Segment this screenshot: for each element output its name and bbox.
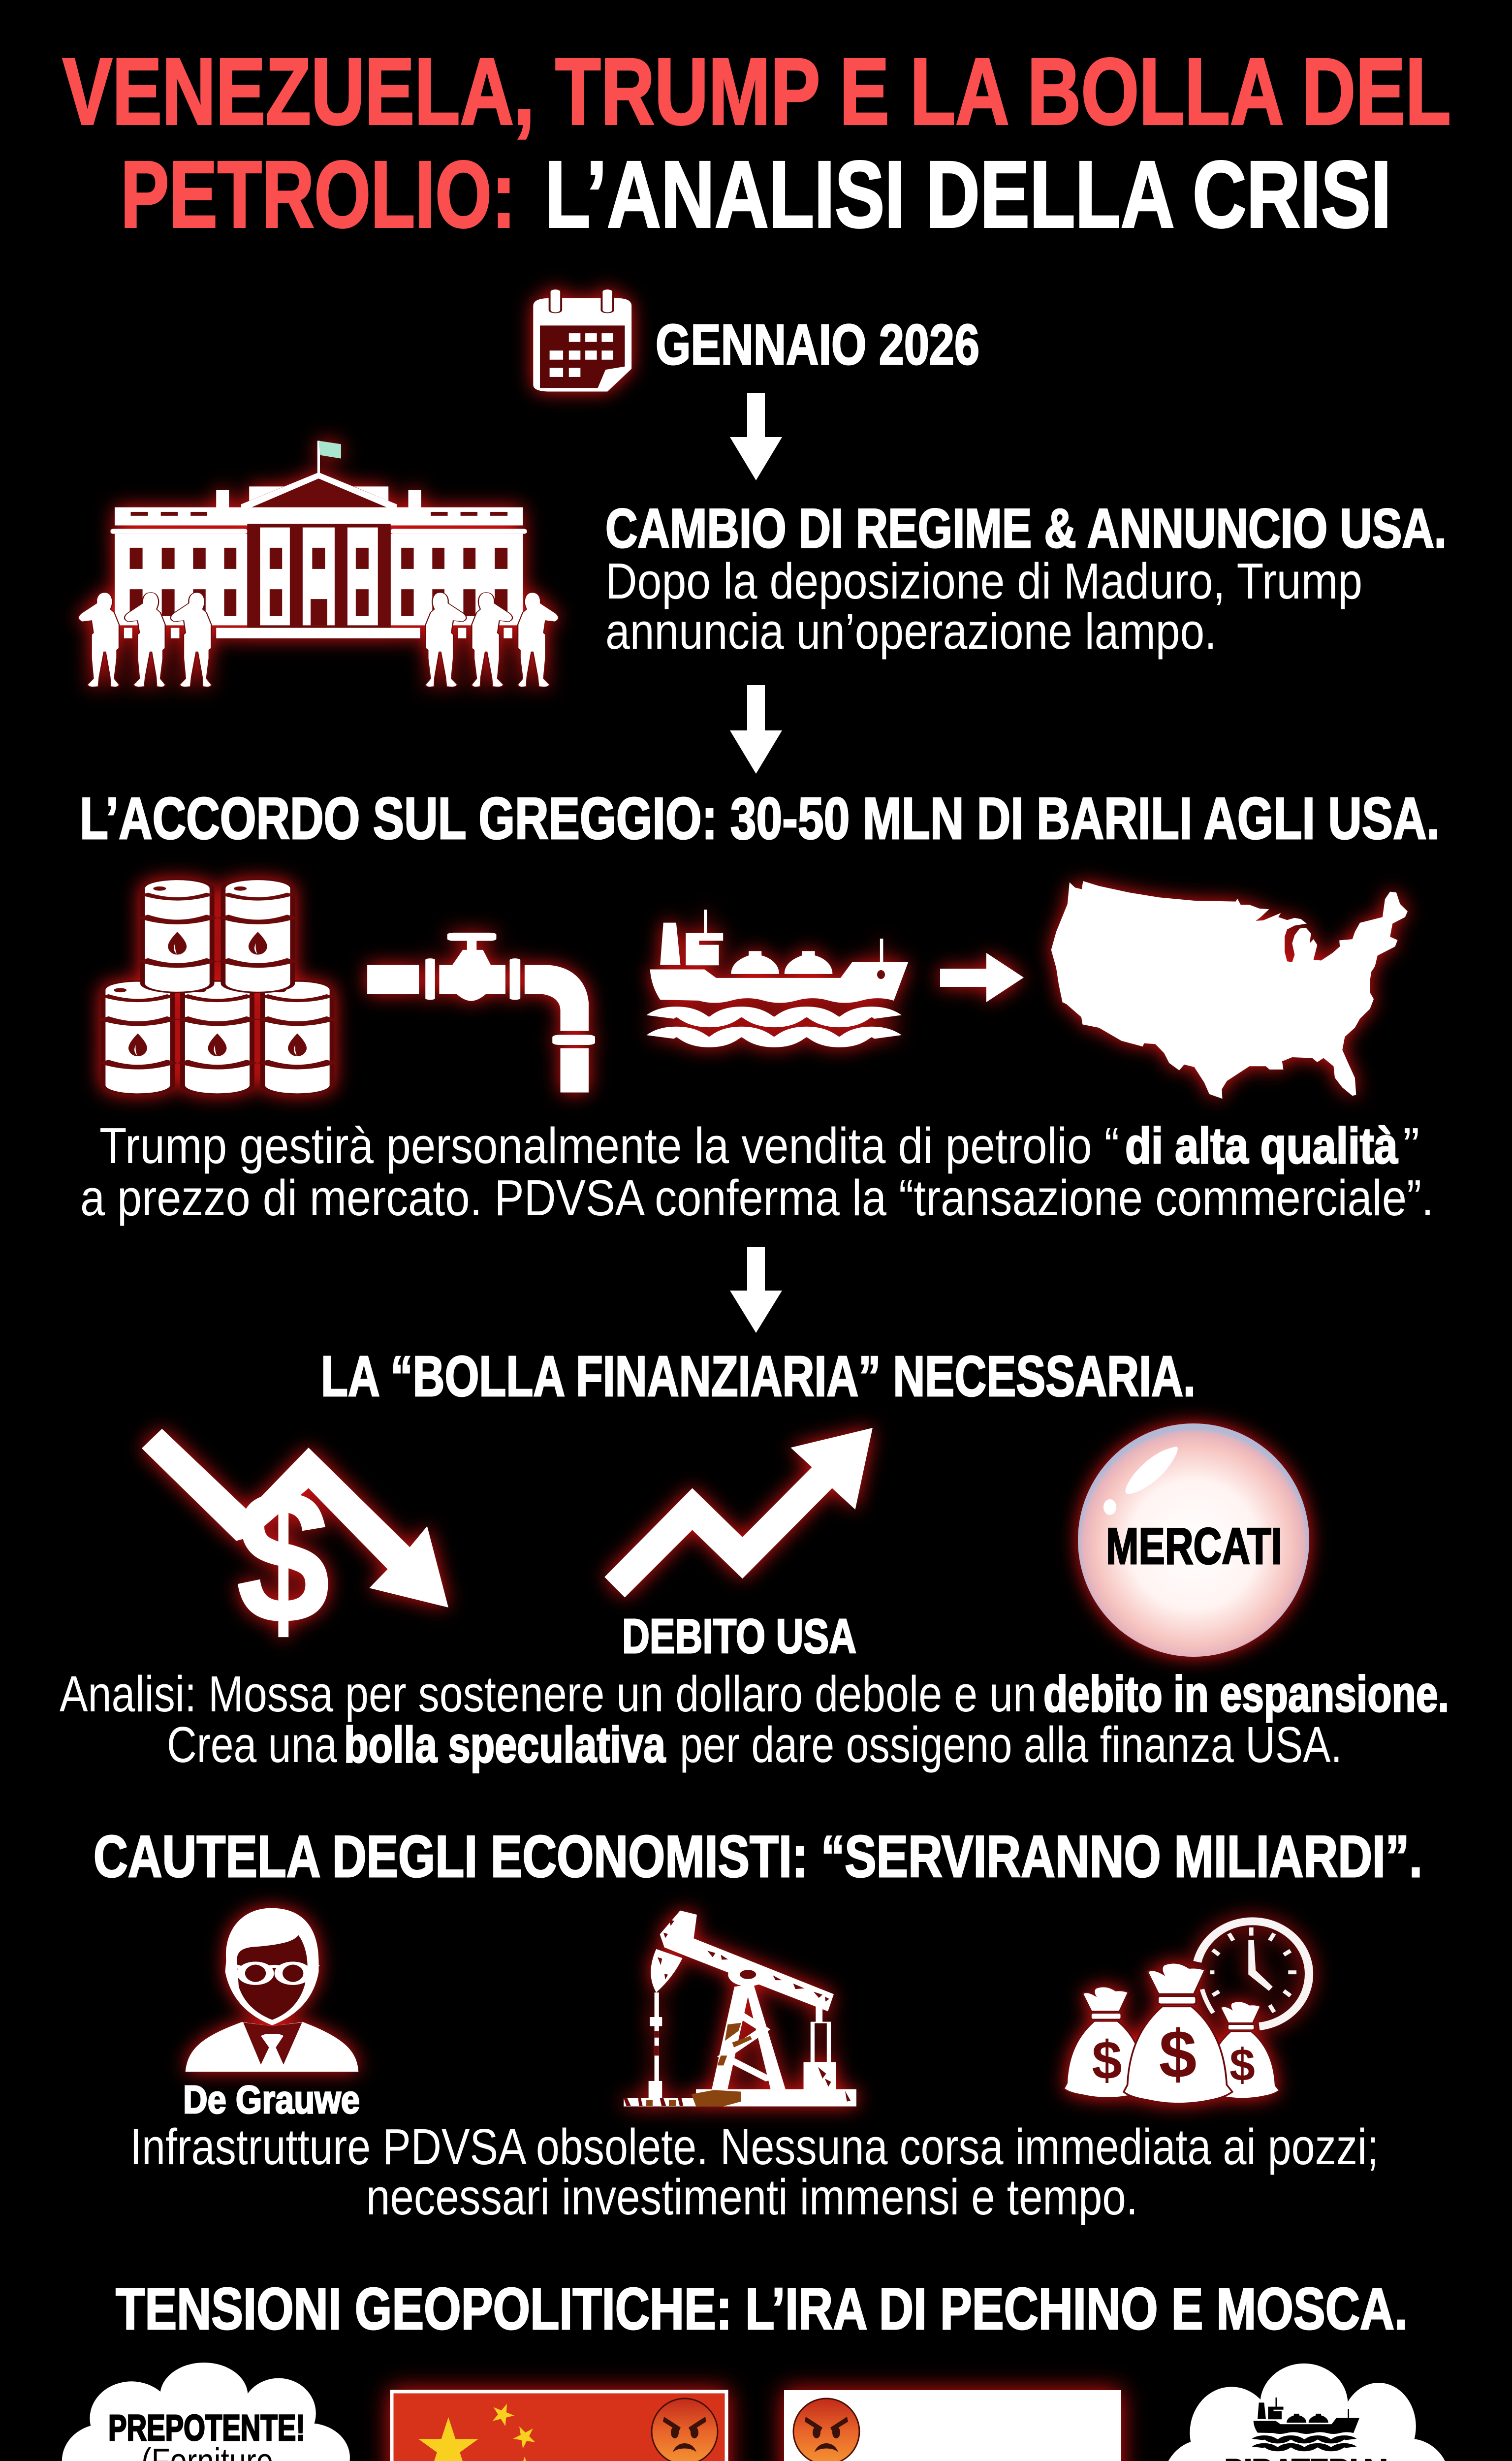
icon: oil tanker	[650, 910, 908, 1042]
date label: GENNAIO 2026	[656, 313, 979, 377]
icon: falling dollar chart: $	[236, 1451, 330, 1663]
icon: angry face on Russia flag	[793, 2398, 859, 2461]
text: crude deal body: di alta qualità	[1125, 1117, 1398, 1174]
panel: geopolitical tensions	[62, 2276, 1450, 2461]
thought cloud: Russia	[1143, 2364, 1450, 2461]
label: De Grauwe: De Grauwe	[183, 2078, 360, 2121]
label: debito USA: DEBITO USA	[622, 1609, 856, 1663]
icon: rising debt chart	[604, 1428, 873, 1597]
text: bubble analysis: Crea una	[167, 1716, 338, 1773]
flag: Russia	[784, 2390, 1121, 2461]
text: crude deal body: ”	[1403, 1117, 1419, 1174]
icon: USA map	[1051, 881, 1408, 1099]
icon: markets bubble: MERCATI	[1106, 1518, 1282, 1575]
icon: money bags and clock: $	[1159, 2017, 1197, 2092]
icon: rusty pumpjack	[624, 1911, 856, 2107]
text: bubble analysis: Analisi: Mossa per sostenere un dollaro debole e un	[60, 1666, 1037, 1722]
text: crude deal body: Trump gestirà personalmente la vendita di petrolio “	[99, 1117, 1119, 1174]
flag: China	[392, 2392, 726, 2461]
arrow: to USA	[940, 953, 1024, 1002]
icon: falling dollar chart	[142, 1429, 448, 1663]
icon: money bags and clock	[1065, 1921, 1309, 2103]
text: regime change body: Dopo la deposizione di Maduro, Trump	[605, 553, 1362, 609]
text: economists body: necessari investimenti immensi e tempo.	[366, 2169, 1138, 2225]
icon: white house with soldiers	[79, 441, 558, 687]
text: bubble analysis: per dare ossigeno alla finanza USA.	[680, 1716, 1342, 1773]
arrow 1	[730, 393, 782, 480]
text: bubble analysis: bolla speculativa	[344, 1716, 666, 1773]
panel: regime change	[79, 441, 1447, 687]
icon: economist De Grauwe	[186, 1908, 358, 2072]
text: regime change body: annuncia un’operazione lampo.	[605, 603, 1217, 660]
thought cloud: China: PREPOTENTE!	[108, 2407, 305, 2448]
arrow 3	[730, 1247, 782, 1333]
icon: oil barrels	[103, 880, 332, 1094]
icon: markets bubble	[1078, 1423, 1309, 1657]
heading: financial bubble: LA “BOLLA FINANZIARIA” NECESSARIA.	[321, 1344, 1196, 1408]
thought cloud: China	[62, 2363, 368, 2461]
panel: financial bubble	[60, 1344, 1463, 1773]
panel: date	[533, 289, 979, 392]
title: PETROLIO:	[121, 141, 516, 247]
panel: economists caution	[94, 1824, 1422, 2225]
panel: crude deal	[80, 786, 1440, 1226]
icon: money bags and clock: $	[1092, 2030, 1122, 2091]
icon: money bags and clock: $	[1229, 2039, 1255, 2090]
icon: tanker in cloud	[1254, 2398, 1359, 2450]
arrow 2	[730, 685, 782, 774]
icon: calendar	[533, 289, 631, 392]
icon: angry face on China flag	[652, 2398, 718, 2461]
icon: pipe and valve	[367, 933, 595, 1093]
